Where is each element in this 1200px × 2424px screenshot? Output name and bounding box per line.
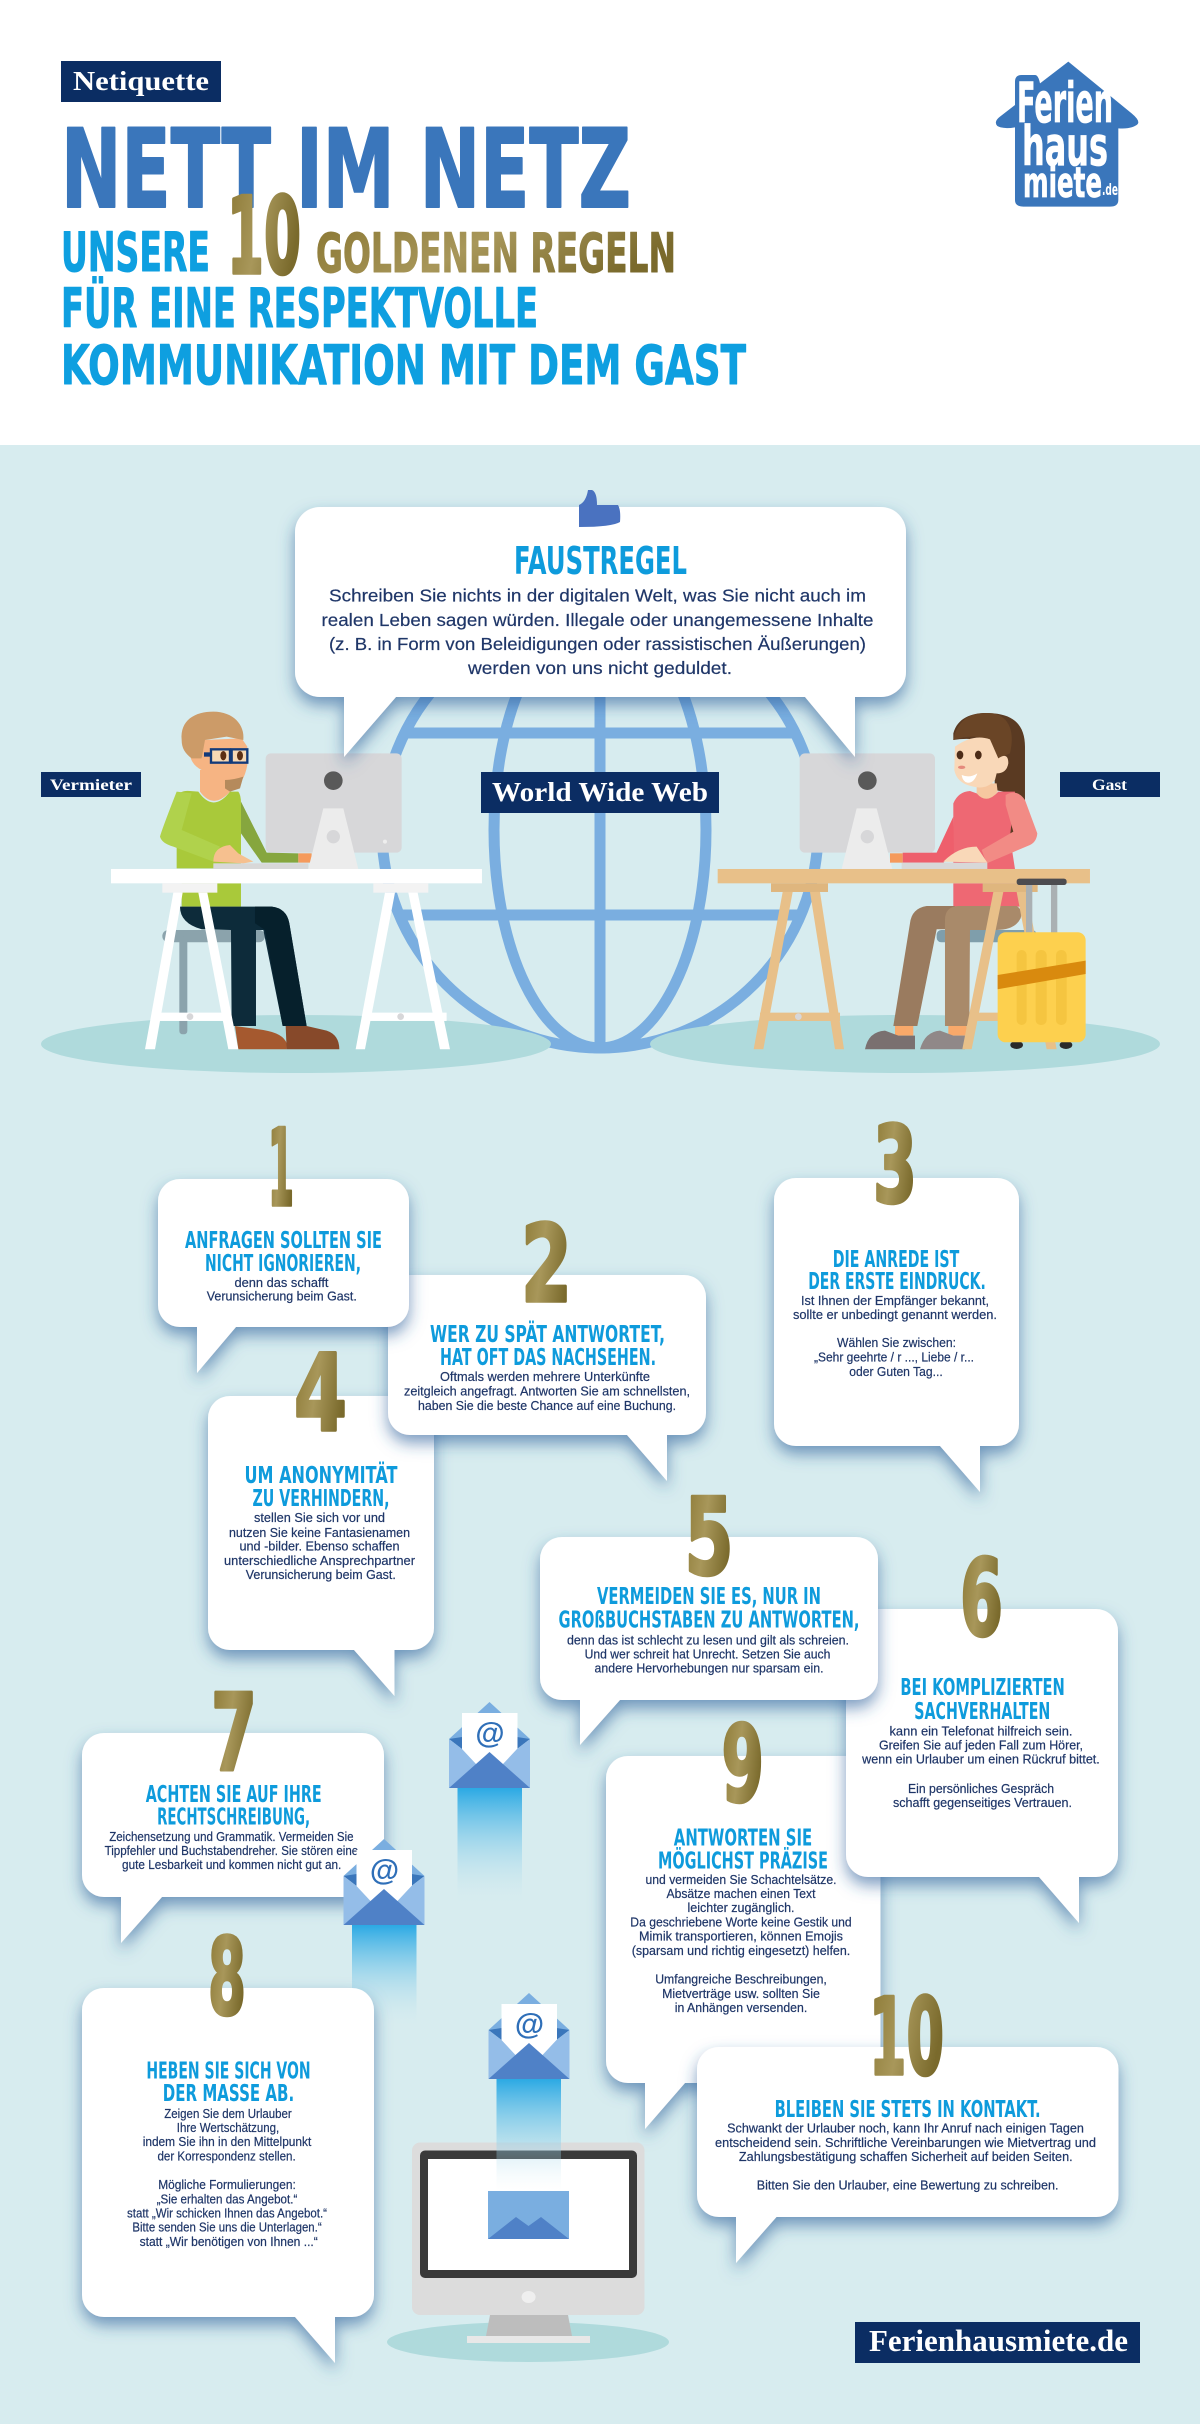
text: rule 8 body: statt „Wir schicken Ihnen das Angebot.“ (127, 2206, 327, 2220)
text: rule 8 body: Ihre Wertschätzung, (177, 2121, 279, 2135)
number 3: 3 (873, 1104, 917, 1227)
logo: Ferienhausmiete house: haus (1022, 115, 1108, 178)
text: rule 8 body: Mögliche Formulierungen: (158, 2178, 296, 2192)
text: rule 9 body: und vermeiden Sie Schachtelsätze. (646, 1873, 836, 1887)
panel: rule 5 (540, 1476, 878, 1745)
text: rule 9 body: in Anhängen versenden. (675, 2001, 807, 2015)
title: 10 (227, 175, 301, 298)
text: Faustregel body: realen Leben sagen würden. Illegale oder unangemessene Inhalte (322, 610, 874, 630)
text: rule 5 body: andere Hervorhebungen nur sparsam ein. (594, 1662, 824, 1676)
text: rule 1 body: Verunsicherung beim Gast. (207, 1290, 357, 1304)
text: rule 2 body: zeitgleich angefragt. Antworten Sie am schnellsten, (404, 1384, 690, 1398)
heading: rule 7: ACHTEN SIE AUF IHRE (146, 1782, 322, 1808)
heading: rule 2: WER ZU SPÄT ANTWORTET, (430, 1320, 665, 1348)
text: rule 6 body: schafft gegenseitiges Vertrauen. (893, 1796, 1072, 1810)
text: rule 5 body: Und wer schreit hat Unrecht. Setzen Sie auch (585, 1648, 830, 1662)
text: Faustregel body: werden von uns nicht geduldet. (467, 658, 732, 678)
text: rule 9 body: (sparsam und richtig eingesetzt) helfen. (632, 1944, 850, 1958)
text: rule 7 body: Zeichensetzung und Grammatik. Vermeiden Sie (109, 1830, 354, 1844)
text: rule 3 body: „Sehr geehrte / r ..., Liebe / r... (814, 1350, 974, 1364)
text: rule 4 body: nutzen Sie keine Fantasienamen (229, 1526, 410, 1540)
logo: Ferienhausmiete house: miete (1023, 158, 1102, 207)
heading: rule 1: ANFRAGEN SOLLTEN SIE (185, 1228, 382, 1254)
icon: thumbs up (579, 490, 620, 527)
heading: rule 9 (658, 1825, 828, 1874)
tag: Netiquette (61, 61, 221, 102)
text: rule 6 body: kann ein Telefonat hilfreich sein. (890, 1724, 1072, 1738)
text: rule 9 body: Mietverträge usw. sollten Sie (662, 1987, 820, 2001)
text: rule 6 body: Greifen Sie auf jeden Fall zum Hörer, (879, 1739, 1083, 1753)
text: rule 9 body: Mimik transportieren, können Emojis (639, 1930, 843, 1944)
label: World Wide Web: World Wide Web (492, 777, 708, 807)
logo: Ferienhausmiete house (996, 62, 1138, 207)
heading: rule 7: RECHTSCHREIBUNG, (157, 1804, 310, 1830)
text: rule 3 body: oder Guten Tag... (849, 1365, 943, 1379)
heading: rule 3: DER ERSTE EINDRUCK. (808, 1269, 986, 1295)
heading: rule 1: NICHT IGNORIEREN, (205, 1251, 361, 1277)
text: rule 3 body: sollte er unbedingt genannt werden. (793, 1308, 997, 1322)
icon: email rising 2 (344, 1839, 424, 2029)
text: rule 4 body: und -bilder. Ebenso schaffen (240, 1540, 400, 1554)
number 9: 9 (722, 1703, 764, 1826)
text: rule 2 body: haben Sie die beste Chance auf eine Buchung. (418, 1399, 676, 1413)
text: rule 6 body: wenn ein Urlauber um einen Rückruf bittet. (861, 1753, 1100, 1767)
heading: rule 1 (185, 1228, 382, 1277)
footer brand tag: Ferienhausmiete.de (869, 2323, 1128, 2358)
text: rule 9 body: Absätze machen einen Text (666, 1887, 816, 1901)
heading: rule 6: BEI KOMPLIZIERTEN (900, 1675, 1065, 1701)
heading: rule 5: GROßBUCHSTABEN ZU ANTWORTEN, (558, 1608, 860, 1634)
text: rule 7 body (105, 1830, 358, 1872)
ground shadow: left (41, 1015, 551, 1073)
panel: rule 1: 1 (268, 1107, 294, 1230)
label: Vermieter: Vermieter (50, 777, 132, 794)
text: rule 3 body: Wählen Sie zwischen: (837, 1336, 956, 1350)
title: UNSERE (61, 221, 210, 284)
number 4: 4 (294, 1332, 347, 1455)
panel: rule 2 (388, 1203, 706, 1481)
text: rule 8 body: indem Sie ihn in den Mittelpunkt (143, 2135, 312, 2149)
text: rule 8 body (127, 2107, 327, 2249)
text: rule 9 body (630, 1873, 852, 2015)
number 8: 8 (208, 1916, 246, 2039)
text: rule 8 body: statt „Wir benötigen von Ihnen ...“ (140, 2235, 318, 2249)
heading: rule 10: BLEIBEN SIE STETS IN KONTAKT. (775, 2097, 1041, 2123)
heading: rule 2 (430, 1320, 665, 1371)
text: rule 10 body: Bitten Sie den Urlauber, eine Bewertung zu schreiben. (757, 2178, 1058, 2192)
heading: rule 9: MÖGLICHST PRÄZISE (658, 1846, 828, 1874)
chart: globe (382, 612, 818, 1048)
icon: email rising 1 (449, 1702, 530, 1906)
panel: rule 7 (82, 1672, 384, 1943)
number 10: 10 (869, 1976, 944, 2099)
heading: rule 2: HAT OFT DAS NACHSEHEN. (440, 1345, 656, 1371)
text: rule 1 body: denn das schafft (234, 1276, 329, 1290)
panel: rule 3 (774, 1104, 1019, 1492)
text: rule 4 body: unterschiedliche Ansprechpartner (224, 1554, 415, 1568)
text: rule 9 body: leichter zugänglich. (688, 1901, 794, 1915)
text: rule 10 body: entscheidend sein. Schriftliche Vereinbarungen wie Mietvertrag und (715, 2136, 1096, 2150)
heading: rule 4 (244, 1461, 398, 1512)
text: rule 5 body: denn das ist schlecht zu lesen und gilt als schreien. (567, 1634, 849, 1648)
text: rule 3 body: Ist Ihnen der Empfänger bekannt, (801, 1294, 989, 1308)
text: rule 8 body: Bitte senden Sie uns die Unterlagen.“ (132, 2221, 322, 2235)
tag: Netiquette: Netiquette (73, 66, 209, 96)
label: Gast: Gast (1092, 777, 1128, 794)
title: KOMMUNIKATION MIT DEM GAST (61, 334, 746, 397)
text: rule 10 body: Schwankt der Urlauber noch, kann Ihr Anruf nach einigen Tagen (727, 2122, 1084, 2136)
heading: rule 8 (146, 2058, 311, 2107)
illustration: desktop monitor (412, 2142, 644, 2343)
icon: closed envelope on screen (488, 2191, 569, 2239)
text: rule 9 body: Umfangreiche Beschreibungen, (655, 1972, 827, 1986)
heading: Faustregel: FAUSTREGEL (514, 539, 687, 583)
icon: email rising 3 (488, 1993, 570, 2191)
icon: email rising 2: @ (370, 1854, 399, 1887)
title: NETT IM NETZ (61, 106, 631, 233)
icon: email rising 1: @ (475, 1717, 505, 1750)
label: Gast (1060, 772, 1160, 797)
number 2: 2 (521, 1203, 572, 1326)
text: rule 4 body: Verunsicherung beim Gast. (246, 1568, 396, 1582)
text: rule 4 body (224, 1511, 415, 1582)
page background: white header (0, 0, 1200, 445)
heading: rule 8: DER MASSE AB. (163, 2081, 294, 2107)
number 5: 5 (684, 1476, 734, 1599)
text: rule 7 body: gute Lesbarkeit und kommen nicht gut an. (122, 1858, 341, 1872)
panel: rule 1 (158, 1107, 409, 1373)
text: rule 3 body (793, 1294, 997, 1379)
ground shadow: monitor (387, 2322, 669, 2362)
text: Faustregel body: Schreiben Sie nichts in der digitalen Welt, was Sie nicht auch im (329, 586, 866, 606)
text: rule 9 body: Da geschriebene Worte keine Gestik und (630, 1916, 852, 1930)
label: Vermieter (41, 772, 141, 797)
title: FÜR EINE RESPEKTVOLLE (61, 277, 538, 340)
number 6: 6 (960, 1537, 1003, 1660)
number 7: 7 (211, 1672, 257, 1795)
heading: rule 4: UM ANONYMITÄT (244, 1461, 398, 1489)
title: GOLDENEN REGELN (316, 222, 676, 285)
text: rule 6 body: Ein persönliches Gespräch (908, 1782, 1054, 1796)
panel: rule 4 (208, 1332, 434, 1696)
text: rule 6 body (861, 1724, 1100, 1810)
heading: rule 3 (808, 1247, 986, 1295)
heading: rule 4: ZU VERHINDERN, (252, 1486, 390, 1512)
heading: rule 5: VERMEIDEN SIE ES, NUR IN (597, 1584, 821, 1610)
label: World Wide Web (481, 772, 719, 813)
panel: rule 9 (606, 1703, 880, 2129)
text: rule 8 body: Zeigen Sie dem Urlauber (164, 2107, 292, 2121)
illustration: host at desk (111, 712, 482, 1049)
heading: rule 6 (900, 1675, 1065, 1725)
text: rule 7 body: Tippfehler und Buchstabendreher. Sie stören eine (105, 1844, 358, 1858)
logo: Ferienhausmiete house: .de (1102, 180, 1118, 199)
text: rule 2 body (404, 1370, 690, 1413)
panel: Faustregel callout (295, 490, 906, 757)
text: rule 1 body (207, 1276, 357, 1304)
text: rule 8 body: „Sie erhalten das Angebot.“ (157, 2192, 297, 2206)
ground shadow: right (650, 1015, 1160, 1073)
icon: email rising 3: @ (515, 2008, 544, 2041)
title (61, 106, 746, 397)
heading: rule 8: HEBEN SIE SICH VON (146, 2058, 311, 2084)
text: Faustregel body (322, 586, 874, 678)
text: Faustregel body: (z. B. in Form von Beleidigungen oder rassistischen Äußerungen) (329, 634, 866, 654)
heading: rule 7 (146, 1782, 322, 1830)
heading: rule 6: SACHVERHALTEN (914, 1699, 1050, 1725)
heading: rule 5 (558, 1584, 860, 1634)
text: rule 2 body: Oftmals werden mehrere Unterkünfte (440, 1370, 650, 1384)
text: rule 5 body (567, 1634, 849, 1676)
text: rule 10 body: Zahlungsbestätigung schaffen Sicherheit auf beiden Seiten. (739, 2150, 1073, 2164)
heading: rule 9: ANTWORTEN SIE (674, 1825, 812, 1851)
panel: rule 6 (846, 1537, 1118, 1923)
text: rule 10 body (715, 2122, 1096, 2192)
panel: rule 8 (82, 1916, 374, 2363)
panel: rule 10 (697, 1976, 1118, 2263)
heading: rule 3: DIE ANREDE IST (833, 1247, 959, 1273)
text: rule 4 body: stellen Sie sich vor und (254, 1511, 385, 1525)
illustration: guest at desk with suitcase (718, 713, 1090, 1049)
text: rule 8 body: der Korrespondenz stellen. (158, 2149, 296, 2163)
